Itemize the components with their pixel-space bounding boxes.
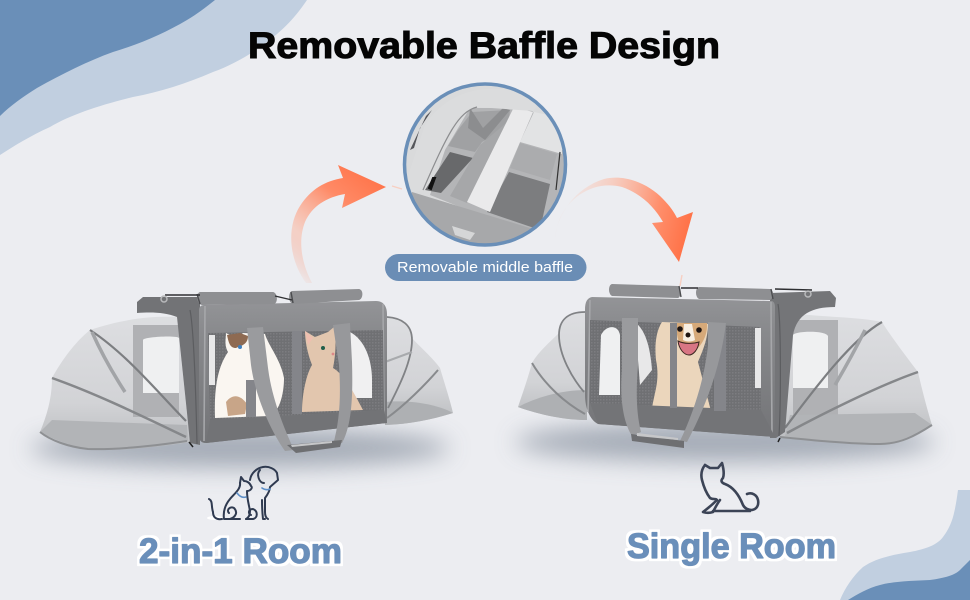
- inset right wall panel: [510, 143, 557, 180]
- inset upper right wall: [520, 112, 562, 154]
- label: single room: Single Room: [627, 527, 836, 566]
- shadow: left carrier: [30, 428, 450, 468]
- carrier: right, single room with dog: [518, 284, 932, 448]
- dog: [652, 322, 711, 411]
- inset photo: removable middle baffle: [404, 84, 570, 250]
- inner strap bars: [670, 323, 726, 411]
- inset zipper: [429, 178, 435, 189]
- decorative wave: bottom-right light: [840, 490, 970, 600]
- bottom handle: [631, 434, 684, 448]
- window mesh: [208, 330, 384, 420]
- bottom handle: [287, 440, 342, 453]
- left mesh tunnel: [40, 317, 190, 450]
- top handles: [197, 292, 277, 305]
- front panel: [199, 301, 387, 443]
- icon: single cat: [701, 463, 758, 513]
- right mesh tunnel: [385, 317, 453, 425]
- inner strap bars: [246, 331, 302, 417]
- label pill: [385, 254, 586, 281]
- inset back compartment: [448, 110, 510, 152]
- fabric below window: [590, 403, 775, 437]
- label pill: Removable middle baffle: [397, 259, 573, 276]
- ragdoll cat: [215, 333, 284, 418]
- front panel: [585, 297, 775, 437]
- inset baffle: [467, 107, 533, 212]
- arrow: from inset circle: [555, 178, 693, 262]
- shadow: right carrier: [515, 422, 935, 462]
- window mesh: [590, 320, 761, 410]
- inset front fabric: [412, 192, 530, 244]
- zipper pull: [805, 291, 811, 297]
- icon: cat and dog: [207, 467, 278, 520]
- title: Removable Baffle Design: [248, 25, 720, 66]
- decorative wave: bottom-right dark: [848, 560, 970, 600]
- left mesh tunnel: [518, 312, 587, 420]
- top handles: [609, 284, 681, 298]
- right mesh tunnel: [780, 313, 932, 444]
- inset ring: [404, 84, 566, 245]
- arrow fade tails: [392, 186, 682, 286]
- decorative wave: top-left light: [0, 0, 307, 155]
- inset left frame: [469, 107, 532, 111]
- arrow: to inset circle: [291, 165, 386, 283]
- carrying straps: [621, 318, 641, 436]
- back end panel: [137, 297, 200, 445]
- zipper pull: [161, 296, 167, 302]
- inset back wall: [430, 108, 570, 235]
- inset grey strap: [450, 132, 502, 203]
- label: 2-in-1 room: 2-in-1 Room: [139, 532, 342, 571]
- decorative wave: top-left dark: [0, 0, 215, 116]
- inset right floor: [487, 172, 550, 230]
- carrier: left, 2-in-1 room with cats: [40, 289, 453, 453]
- carrying straps: [247, 327, 294, 451]
- inset left floor: [425, 152, 473, 193]
- back end panel: [770, 291, 836, 438]
- tabby cat: [302, 327, 363, 412]
- fabric below window: [206, 410, 387, 443]
